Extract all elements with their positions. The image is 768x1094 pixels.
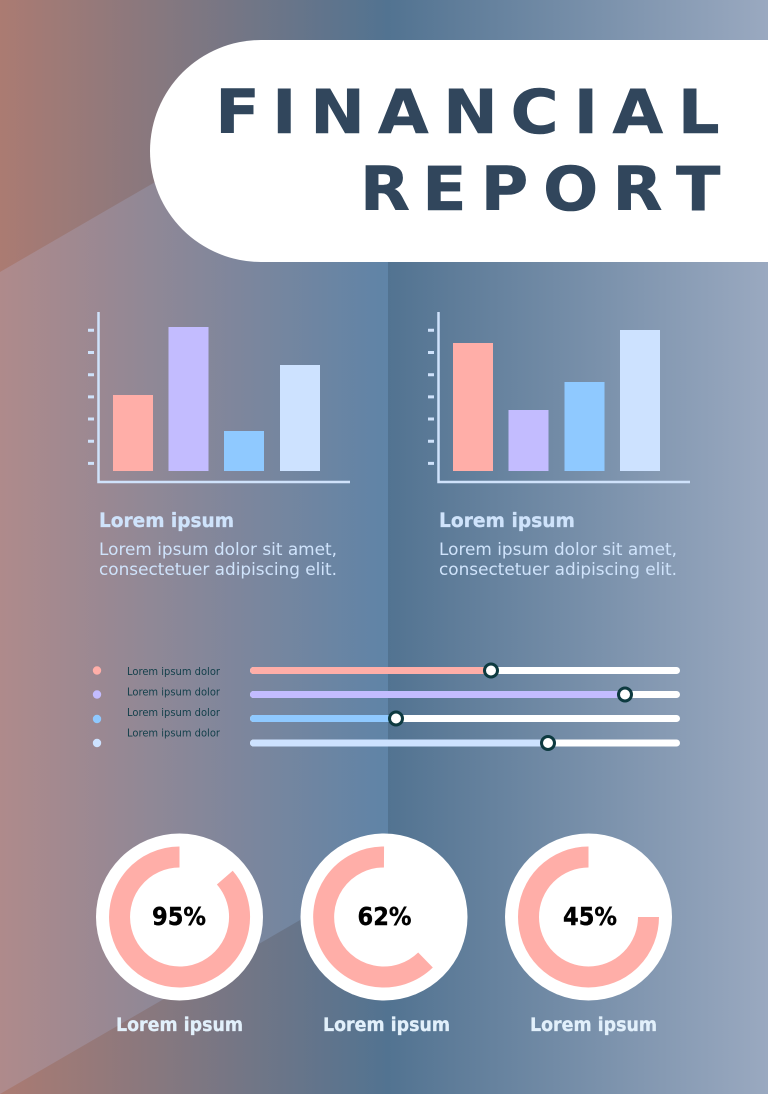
right caption heading: Lorem ipsum xyxy=(439,509,575,532)
background light panel xyxy=(0,47,388,1094)
left caption line 1: Lorem ipsum dolor sit amet, xyxy=(99,540,337,560)
donut chart 45%: 45% xyxy=(563,902,617,931)
left bar 4 xyxy=(280,365,320,471)
legend dot 3 xyxy=(93,715,101,723)
title line 1: FINANCIAL xyxy=(215,76,720,147)
panel: left bar chart xyxy=(88,312,350,482)
title line 2: REPORT xyxy=(360,154,720,225)
donut chart 62%: 62% xyxy=(358,902,412,931)
legend dot 1 xyxy=(93,666,101,675)
text block: left chart caption xyxy=(99,509,337,580)
donut chart 45% xyxy=(505,834,672,1000)
right bar 1 xyxy=(453,343,493,471)
right bar 2 xyxy=(508,410,548,471)
panel: right bar chart xyxy=(428,312,690,482)
title banner xyxy=(150,40,768,262)
legend label 3: Lorem ipsum dolor xyxy=(127,707,221,719)
left chart axes xyxy=(98,312,350,482)
left bar 2 xyxy=(168,327,208,471)
left bar 1 xyxy=(113,395,153,471)
donut chart 62% xyxy=(300,834,468,1000)
donut label 1: Lorem ipsum xyxy=(116,1015,243,1036)
left caption heading: Lorem ipsum xyxy=(99,509,234,532)
slider 4 xyxy=(250,736,680,750)
legend label 4: Lorem ipsum dolor xyxy=(127,728,221,740)
legend label 1: Lorem ipsum dolor xyxy=(127,666,221,678)
donut label 2: Lorem ipsum xyxy=(323,1015,450,1036)
slider group xyxy=(250,664,680,750)
donut chart 95% xyxy=(96,834,263,1000)
slider 1 xyxy=(250,664,680,677)
legend dot 4 xyxy=(93,739,101,747)
donut label 3: Lorem ipsum xyxy=(530,1015,657,1036)
left bar 3 xyxy=(224,431,264,471)
slider 2 xyxy=(250,688,680,701)
legend label 2: Lorem ipsum dolor xyxy=(127,686,221,698)
left chart ticks xyxy=(88,330,94,463)
right caption line 2: consectetuer adipiscing elit. xyxy=(439,560,677,580)
right chart ticks xyxy=(428,330,434,463)
banner pill xyxy=(150,40,768,262)
right bar 4 xyxy=(620,330,660,471)
right caption line 1: Lorem ipsum dolor sit amet, xyxy=(439,540,677,560)
legend dot 2 xyxy=(93,690,101,699)
right bar 3 xyxy=(564,382,604,471)
legend xyxy=(93,666,221,747)
donut chart 95%: 95% xyxy=(152,902,206,931)
slider 3 xyxy=(250,712,680,725)
right chart axes xyxy=(438,312,690,482)
left caption line 2: consectetuer adipiscing elit. xyxy=(99,560,337,580)
text block: right chart caption xyxy=(439,509,677,580)
